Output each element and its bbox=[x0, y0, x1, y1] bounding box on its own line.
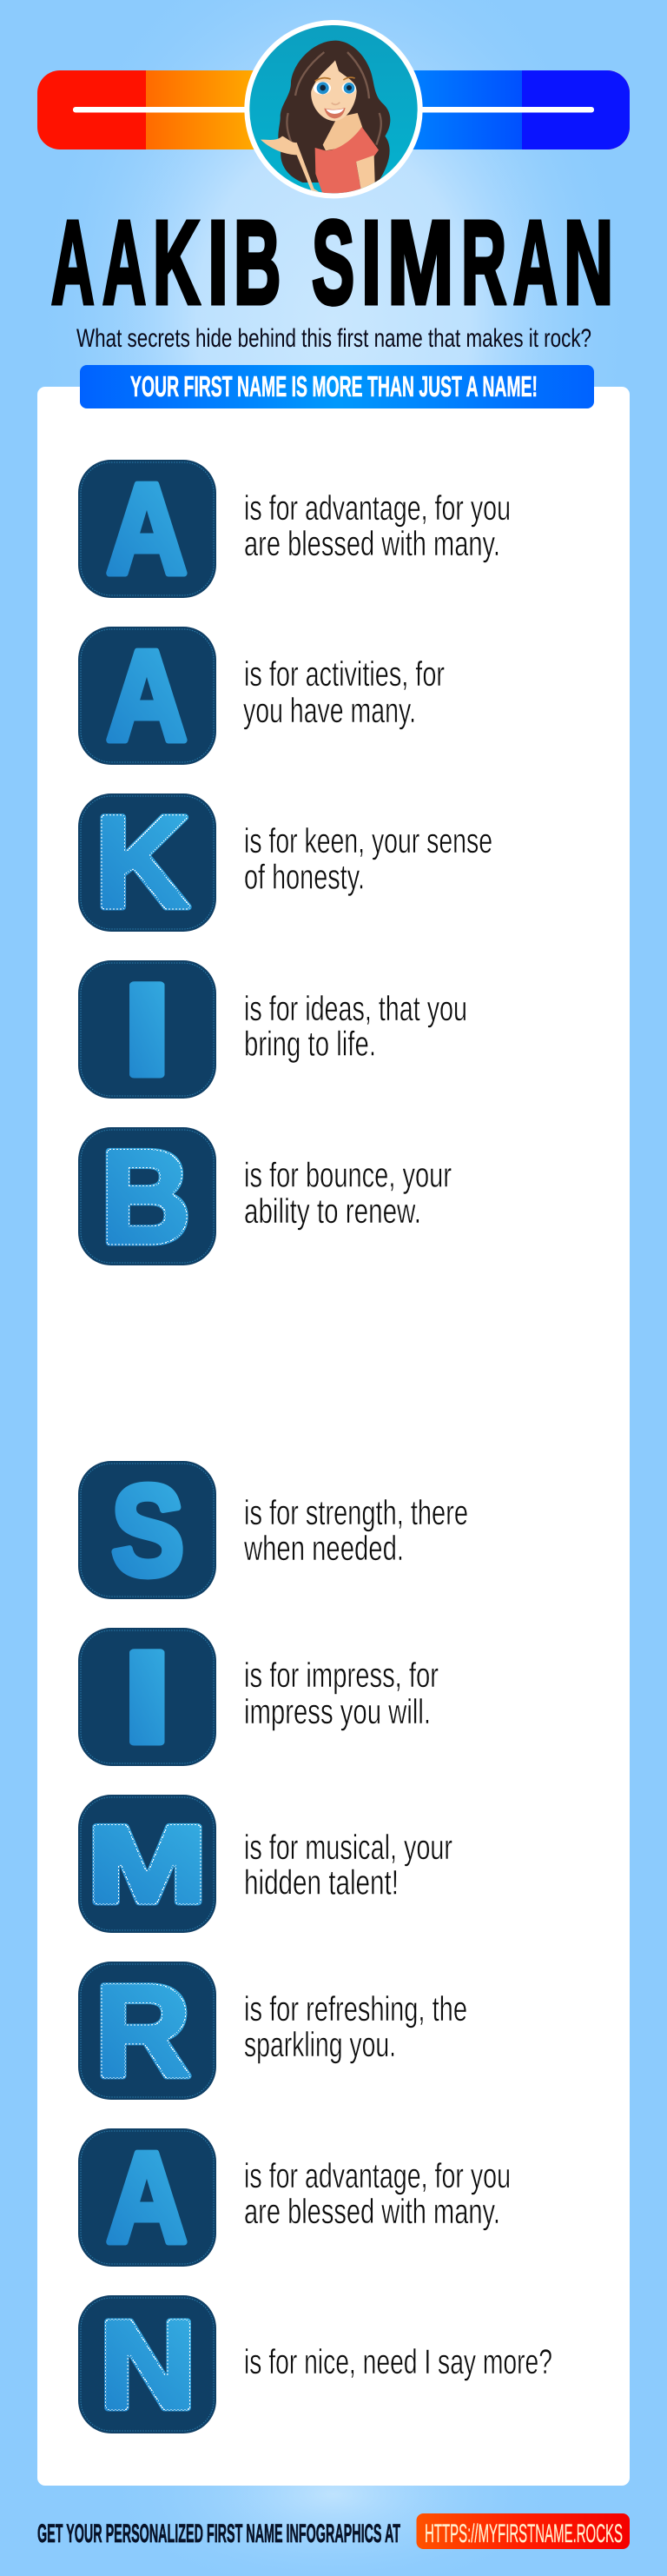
shirt bbox=[315, 127, 379, 194]
icon: letter B: B bbox=[101, 1123, 190, 1271]
row: S strength bbox=[78, 1459, 468, 1603]
title: S bbox=[312, 196, 354, 329]
icon: letter I bbox=[78, 1623, 216, 1769]
icon: letter K: K bbox=[95, 789, 189, 935]
icon: letter N: N bbox=[99, 2294, 196, 2435]
title: K bbox=[153, 196, 201, 329]
title: I bbox=[207, 196, 228, 329]
icon: letter S: S bbox=[111, 1459, 184, 1603]
text bbox=[244, 489, 511, 563]
right eye bbox=[342, 83, 356, 94]
icon: letter I bbox=[78, 956, 216, 1102]
header colour bar bbox=[37, 70, 630, 149]
row: B bounce bbox=[78, 1123, 452, 1271]
row: I impress bbox=[78, 1623, 439, 1769]
neck and chest bbox=[323, 113, 362, 150]
text: hidden talent! bbox=[244, 1863, 399, 1902]
text: are blessed with many. bbox=[244, 525, 500, 563]
avatar portrait bbox=[244, 20, 423, 198]
title bbox=[51, 196, 614, 329]
text: bring to life. bbox=[244, 1026, 376, 1064]
title: I bbox=[361, 196, 381, 329]
footer link button bbox=[417, 2513, 630, 2549]
text: are blessed with many. bbox=[244, 2193, 500, 2231]
icon: letter I: I bbox=[122, 956, 172, 1102]
text: is for advantage, for you bbox=[244, 489, 511, 528]
title: M bbox=[387, 196, 454, 329]
text: sparkling you. bbox=[244, 2026, 396, 2064]
icon: letter N bbox=[78, 2294, 216, 2435]
text bbox=[244, 1156, 452, 1231]
left eye bbox=[314, 82, 331, 95]
text: is for strength, there bbox=[244, 1494, 468, 1532]
row: A advantage bbox=[78, 2126, 511, 2270]
text: is for impress, for bbox=[244, 1656, 439, 1695]
title: A bbox=[51, 196, 94, 329]
title: A bbox=[102, 196, 146, 329]
icon: letter K bbox=[78, 789, 216, 935]
icon: letter B bbox=[78, 1123, 216, 1271]
row: I ideas bbox=[78, 956, 467, 1102]
text: is for activities, for bbox=[244, 655, 445, 694]
text bbox=[243, 1494, 468, 1568]
text bbox=[244, 2157, 511, 2231]
banner bbox=[80, 365, 594, 408]
icon: letter M bbox=[78, 1795, 216, 1933]
text bbox=[244, 1656, 439, 1731]
icon: letter A: A bbox=[106, 624, 188, 768]
text: is for musical, your bbox=[244, 1829, 452, 1867]
face bbox=[311, 60, 357, 121]
row: K keen bbox=[78, 789, 492, 935]
icon: letter R bbox=[78, 1957, 216, 2103]
title: B bbox=[234, 196, 281, 329]
title: N bbox=[564, 196, 614, 329]
panel: white content card bbox=[37, 387, 630, 2486]
icon: letter R: R bbox=[95, 1957, 191, 2103]
text: is for ideas, that you bbox=[244, 990, 467, 1028]
hair bbox=[278, 41, 390, 183]
left arm and hand bbox=[261, 136, 323, 194]
icon: letter A bbox=[78, 2126, 216, 2270]
title: R bbox=[461, 196, 506, 329]
icon: letter A: A bbox=[106, 2126, 188, 2270]
icon: letter I: I bbox=[122, 1623, 172, 1769]
title: A bbox=[513, 196, 558, 329]
text bbox=[244, 822, 492, 897]
mouth bbox=[324, 108, 346, 118]
text: is for advantage, for you bbox=[244, 2157, 511, 2195]
row: M musical bbox=[78, 1795, 452, 1933]
row: N nice bbox=[78, 2294, 552, 2435]
row: A activities bbox=[78, 624, 445, 768]
icon: letter S bbox=[78, 1459, 216, 1603]
text: ability to renew. bbox=[244, 1192, 421, 1231]
nose bbox=[332, 103, 340, 104]
row: A advantage bbox=[78, 457, 511, 601]
text: of honesty. bbox=[244, 859, 365, 897]
text bbox=[244, 1829, 452, 1902]
right arm bbox=[356, 155, 375, 189]
text: impress you will. bbox=[244, 1693, 431, 1731]
text bbox=[244, 990, 467, 1064]
icon: letter M: M bbox=[87, 1803, 207, 1926]
text: is for bounce, your bbox=[244, 1156, 452, 1194]
icon: letter A: A bbox=[106, 457, 188, 601]
text: is for refreshing, the bbox=[244, 1990, 467, 2028]
text bbox=[243, 655, 445, 730]
text: when needed. bbox=[243, 1530, 404, 1568]
text: is for keen, your sense bbox=[244, 822, 492, 860]
text: you have many. bbox=[243, 692, 416, 730]
icon: letter A bbox=[78, 457, 216, 601]
text bbox=[244, 1990, 467, 2064]
row: R refreshing bbox=[78, 1957, 467, 2103]
icon: letter A bbox=[78, 624, 216, 768]
eyebrows bbox=[315, 77, 355, 81]
